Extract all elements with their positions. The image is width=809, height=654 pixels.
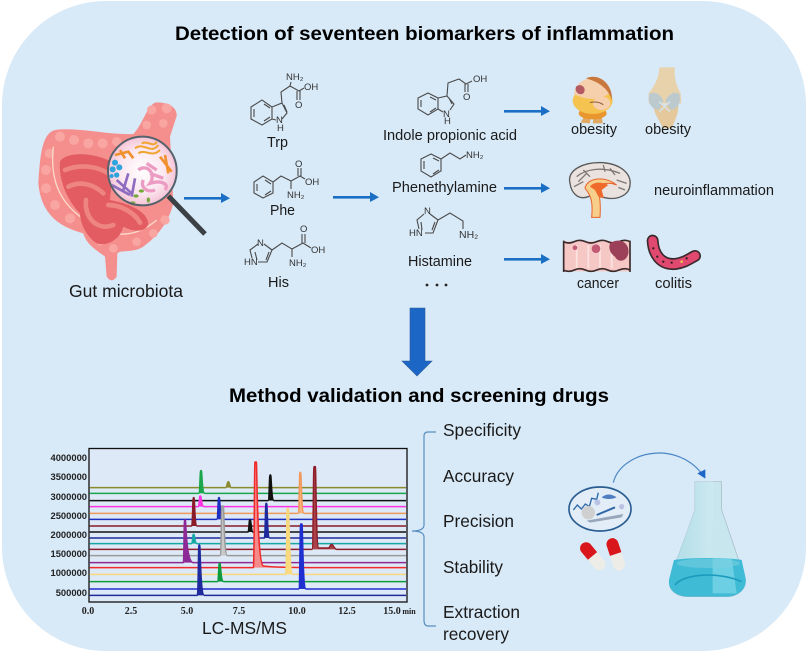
label: phenethylamine: Phenethylamine xyxy=(392,180,497,196)
arrow: histamine to intestine xyxy=(504,254,550,264)
y axis labels: 1000000 xyxy=(50,567,87,578)
molecule: phenylalanine xyxy=(254,159,319,201)
x axis labels: 2.5 xyxy=(125,606,137,617)
label: obesity (knee): obesity xyxy=(645,122,692,138)
validation list: recovery xyxy=(443,624,509,644)
arrow: phenethylamine to brain xyxy=(504,183,550,193)
y axis labels: 3500000 xyxy=(50,471,87,482)
y axis labels: 4000000 xyxy=(50,452,87,463)
molecule: indole propionic acid: N xyxy=(443,109,450,120)
x axis labels xyxy=(82,606,416,617)
molecule: histidine: N xyxy=(257,238,264,249)
molecule: indole propionic acid: O xyxy=(463,92,470,103)
x axis labels: 7.5 xyxy=(233,606,245,617)
y axis labels: 2000000 xyxy=(50,529,87,540)
molecule: histamine: NH₂ xyxy=(459,229,478,241)
molecule: tryptophan: NH₂ xyxy=(286,72,304,83)
x axis labels: 15.0 xyxy=(383,606,401,617)
arrow: amino acids to metabolites xyxy=(333,192,379,202)
arrow: curved to flask xyxy=(613,453,705,483)
x axis labels: 5.0 xyxy=(181,606,193,617)
chart: LC-MS/MS chromatogram xyxy=(50,448,416,617)
molecule: phenylalanine: OH xyxy=(305,177,319,188)
molecule: tryptophan: N xyxy=(276,115,283,126)
chromatogram traces xyxy=(90,462,406,595)
molecule: indole propionic acid: OH xyxy=(473,74,487,85)
label: indole propionic acid: Indole propionic acid xyxy=(383,128,517,144)
molecule: histidine: O xyxy=(300,224,307,235)
label: His: His xyxy=(268,275,289,291)
icon: flask with liquid xyxy=(669,482,746,597)
x axis labels: 10.0 xyxy=(288,606,306,617)
label: histamine: Histamine xyxy=(408,254,472,270)
validation list xyxy=(443,420,521,644)
ellipsis dots xyxy=(426,284,447,286)
label: neuroinflammation: neuroinflammation xyxy=(654,182,774,199)
molecule: indole propionic acid xyxy=(418,74,487,127)
label: Trp: Trp xyxy=(267,135,288,151)
icon: obese character xyxy=(573,77,613,123)
validation list: Stability xyxy=(443,557,503,577)
heading: method validation: Method validation and screening drugs xyxy=(229,386,609,407)
molecule: phenylalanine: NH₂ xyxy=(287,190,305,201)
icon: brain xyxy=(570,163,630,217)
icon: knee joint xyxy=(649,67,681,128)
molecule: histamine: N xyxy=(424,206,431,217)
validation list: Accuracy xyxy=(443,466,514,486)
icon: gut with magnifying glass xyxy=(38,103,205,280)
molecule: tryptophan: OH xyxy=(304,82,318,93)
validation list: Precision xyxy=(443,511,514,531)
validation list: Specificity xyxy=(443,420,521,440)
label: cancer: cancer xyxy=(577,276,619,292)
arrow: gut to amino acids xyxy=(184,193,230,203)
molecule: tryptophan: H xyxy=(277,123,284,134)
molecule: phenethylamine xyxy=(421,150,484,177)
molecule: histamine: HN xyxy=(409,228,423,239)
label: obesity (character): obesity xyxy=(571,122,618,138)
icon: pills xyxy=(578,537,627,573)
molecule: phenylalanine: O xyxy=(295,159,302,170)
icon: inflamed colon (colitis) xyxy=(652,241,695,264)
x axis labels: min xyxy=(402,607,416,616)
y axis labels xyxy=(50,452,87,598)
validation list: Extraction xyxy=(443,602,520,622)
molecule: tryptophan: O xyxy=(295,100,302,111)
molecule: histidine: OH xyxy=(311,245,325,256)
label: Phe: Phe xyxy=(270,203,295,219)
title: detection of biomarkers: Detection of seventeen biomarkers of inflammation xyxy=(175,24,674,45)
molecule: tryptophan xyxy=(251,72,318,134)
icon: colon cancer section xyxy=(563,240,630,272)
x axis labels: 12.5 xyxy=(338,606,356,617)
icon: microbes in oval xyxy=(569,487,631,531)
molecule: histidine: HN xyxy=(244,257,258,268)
molecule: phenethylamine: NH₂ xyxy=(466,150,484,161)
bracket xyxy=(412,432,436,626)
x axis labels: 0.0 xyxy=(82,606,94,617)
molecule: indole propionic acid: H xyxy=(444,116,451,127)
y axis labels: 500000 xyxy=(56,587,87,598)
y axis labels: 2500000 xyxy=(50,510,87,521)
molecule: histidine xyxy=(244,224,325,269)
big down arrow xyxy=(402,308,432,376)
molecule: histamine xyxy=(409,206,478,241)
arrow: indole propionic acid to disease xyxy=(504,106,550,116)
label: LC-MS/MS: LC-MS/MS xyxy=(202,618,287,638)
y axis labels: 1500000 xyxy=(50,548,87,559)
label: gut microbiota: Gut microbiota xyxy=(69,281,183,301)
label: colitis: colitis xyxy=(655,276,692,292)
y axis labels: 3000000 xyxy=(50,491,87,502)
molecule: histidine: NH₂ xyxy=(289,258,307,269)
